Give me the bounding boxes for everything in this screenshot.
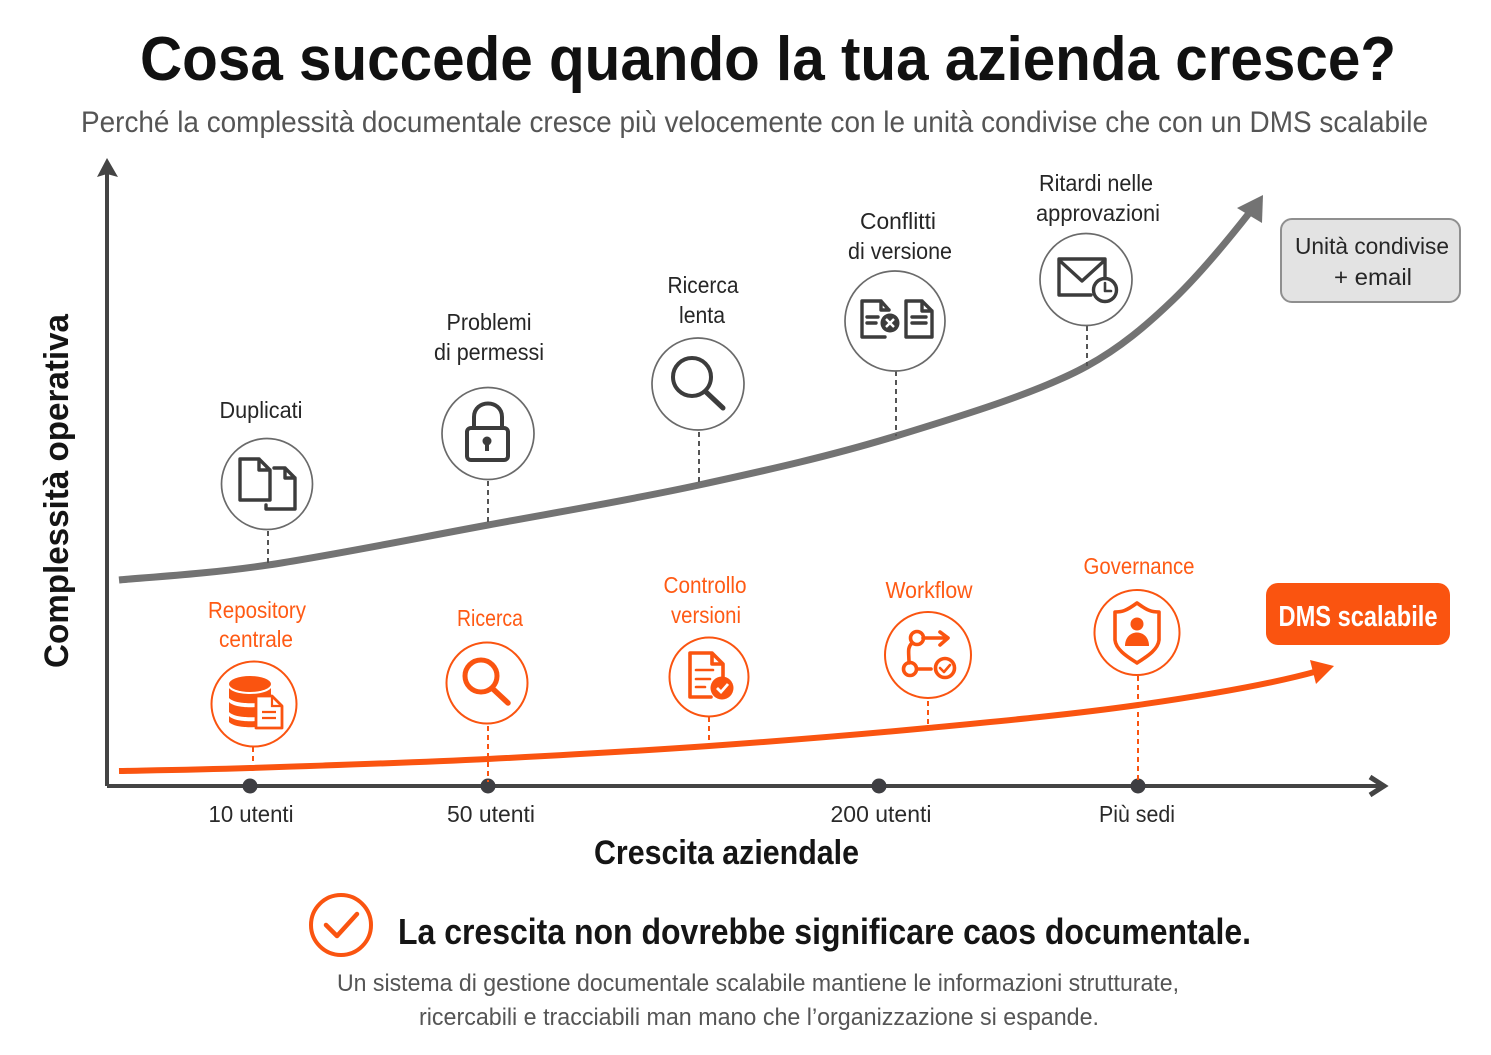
issue: Ricerca lenta: lenta [679,302,725,328]
conclusion heading: La crescita non dovrebbe significare caos documentale. [398,911,1251,952]
check icon [311,895,371,955]
feature: Controllo versioni [664,572,748,746]
feature: Repository centrale: Repository [208,597,306,623]
x axis tick labels: 200 utenti [830,801,932,827]
feature: Governance: Governance [1084,553,1194,579]
x axis title: Crescita aziendale [594,834,859,872]
issue: Ricerca lenta: Ricerca [668,272,739,298]
y axis title: Complessità operativa [38,313,76,668]
conclusion text [337,970,1179,1031]
feature: Repository centrale: centrale [219,626,293,652]
issue: Ritardi nelle approvazioni [1036,170,1160,366]
conclusion text: Un sistema di gestione documentale scalabile mantiene le informazioni strutturate, [337,970,1179,997]
x axis tick labels: Più sedi [1099,801,1175,827]
feature: Ricerca: Ricerca [457,605,523,631]
x axis tick labels [208,801,1175,827]
x axis tick labels: 50 utenti [447,801,535,827]
orange curve: scalable DMS [119,660,1334,771]
issue: Problemi di permessi: di permessi [434,339,544,365]
issue: Ricerca lenta [652,272,744,486]
label: Unità condivise + email: Unità condivise [1295,233,1449,259]
grey curve: shared drives and email [119,195,1263,580]
x axis tick labels: 10 utenti [208,801,294,827]
label: DMS scalabile: DMS scalabile [1278,601,1438,633]
issue: Conflitti di versione: di versione [848,238,952,264]
feature: Ricerca [446,605,528,782]
label: DMS scalabile [1266,583,1450,645]
feature: Governance [1084,553,1194,782]
feature: Workflow [885,577,973,730]
y axis [97,158,118,786]
label: Unità condivise + email [1281,219,1460,302]
conclusion text: ricercabili e tracciabili man mano che l’organizzazione si espande. [419,1004,1099,1031]
issue: Duplicati: Duplicati [220,397,302,423]
issue: Conflitti di versione: Conflitti [860,208,936,234]
issue: Problemi di permessi: Problemi [446,309,532,335]
issue: Conflitti di versione [845,208,952,436]
subtitle: Perché la complessità documentale cresce più velocemente con le unità condivise che con un DMS scalabile [81,106,1428,139]
label: Unità condivise + email: + email [1334,264,1412,290]
issue: Problemi di permessi [434,309,544,526]
x axis [107,777,1384,795]
issue: Ritardi nelle approvazioni: Ritardi nelle [1039,170,1153,196]
title: Cosa succede quando la tua azienda cresce? [140,25,1396,94]
issue: Ritardi nelle approvazioni: approvazioni [1036,200,1160,226]
feature: Workflow: Workflow [886,577,973,603]
feature: Controllo versioni: Controllo [664,572,746,598]
feature: Repository centrale [208,597,306,766]
issue: Duplicati [220,397,312,565]
feature: Controllo versioni: versioni [671,602,741,628]
